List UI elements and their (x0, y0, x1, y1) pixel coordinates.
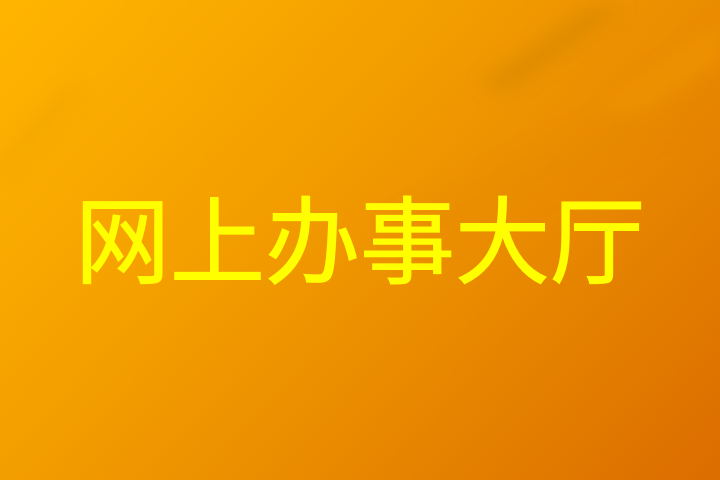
title: 网上办事大厅 (75, 191, 645, 297)
